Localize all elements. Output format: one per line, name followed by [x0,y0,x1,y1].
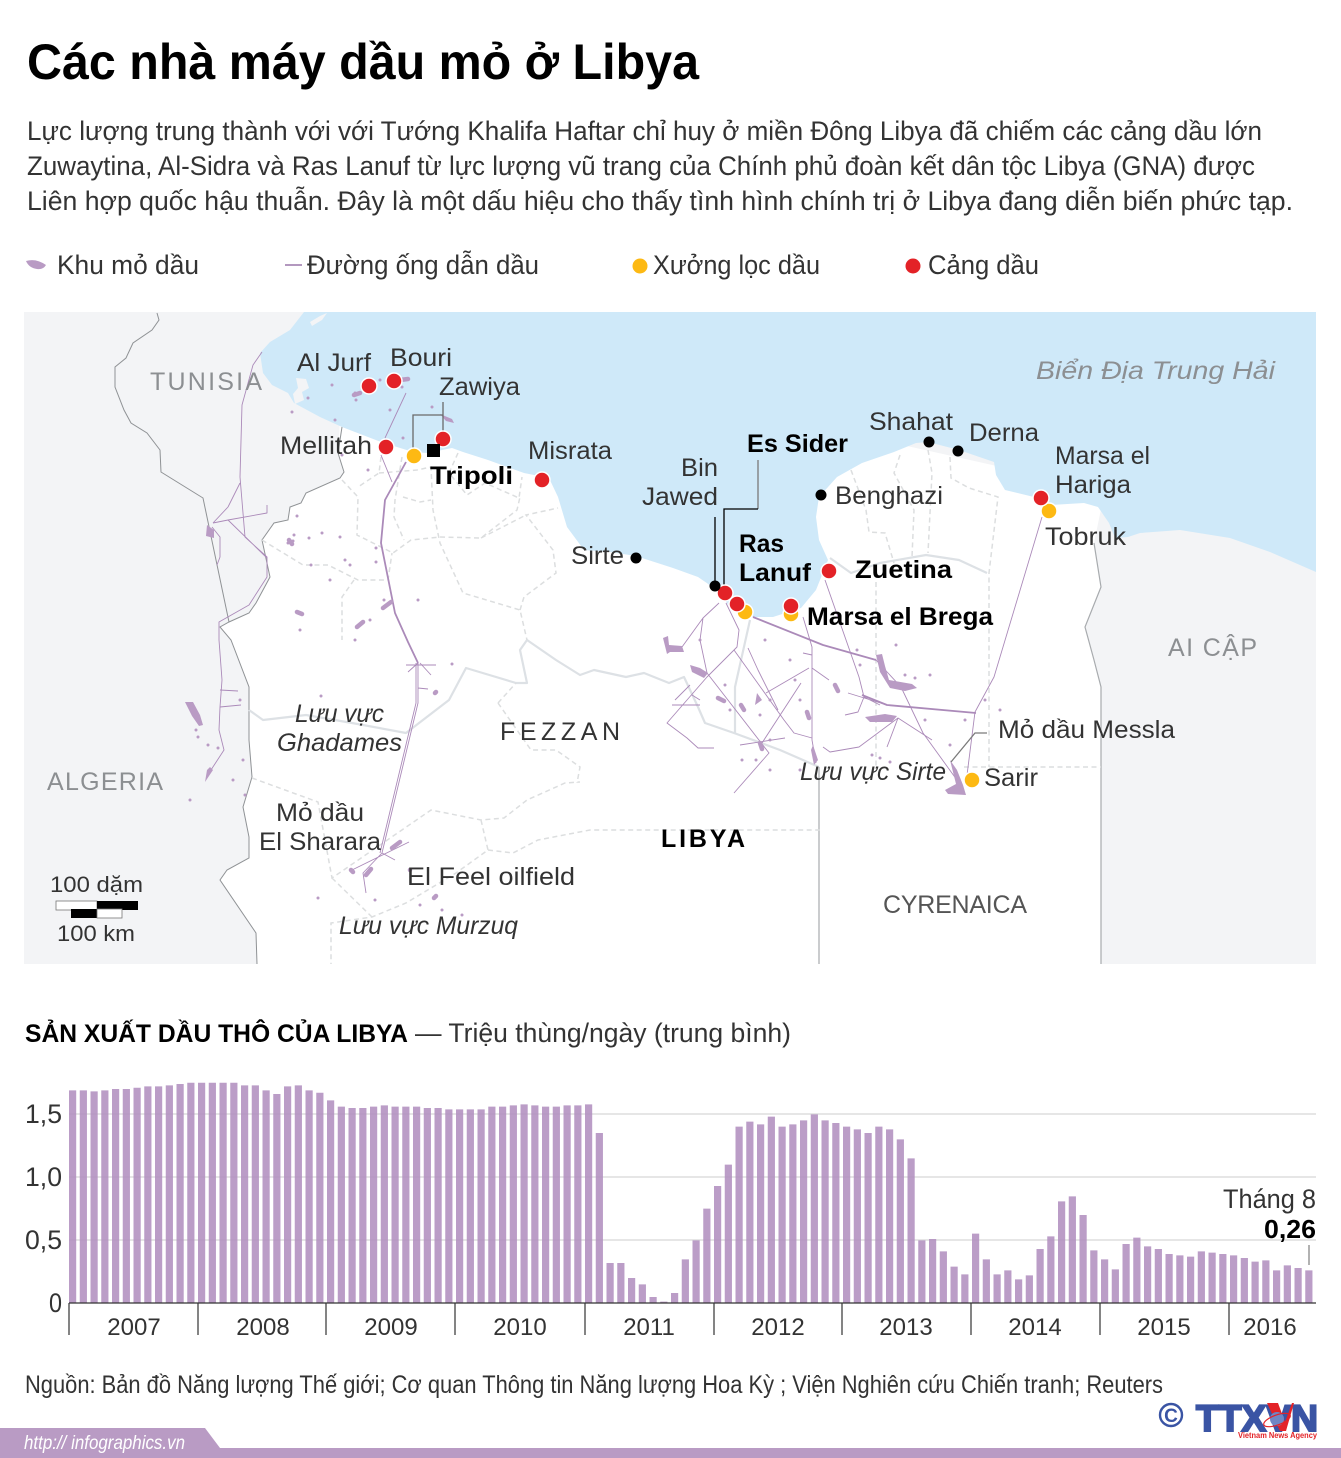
intro text block: Lực lượng trung thành với với Tướng Khalifa Haftar chỉ huy ở miền Đông Libya đã chiếm các cảng dầu lớn [27,116,1262,146]
scale bar: 100 km [57,921,135,946]
map labels: Ras [739,530,784,558]
map labels: TUNISIA [150,368,262,396]
logo: TTXVN: TTXVN [1196,1398,1318,1439]
legend: pipeline: Đường ống dẫn dầu [307,249,539,280]
map labels: Es Sider [747,430,848,458]
map labels: CYRENAICA [883,891,1027,919]
legend: oil port: Cảng dầu [928,250,1039,280]
map labels: Marsa el [1055,442,1150,470]
source: Nguồn: Bản đồ Năng lượng Thế giới; Cơ quan Thông tin Năng lượng Hoa Kỳ ; Viện Nghiên cứu Chiến tranh; Reuters [25,1371,1163,1399]
scale bar: 100 dặm [50,872,143,897]
legend: oil field: Khu mỏ dầu [57,250,199,280]
map labels: Misrata [528,437,612,465]
oil fields [185,379,1000,915]
map labels: Derna [969,419,1039,447]
legend [26,249,1039,280]
map labels: Lưu vực Sirte [800,758,946,786]
map labels: Marsa el Brega [807,603,994,631]
intro text block: Zuwaytina, Al-Sidra và Ras Lanuf từ lực lượng vũ trang của Chính phủ đoàn kết dân tộc Libya (GNA) được [27,151,1255,181]
year labels: 2011 [623,1314,675,1341]
chart heading: — Triệu thùng/ngày (trung bình) [415,1018,791,1048]
pipelines [209,352,1042,893]
intro text block: Liên hợp quốc hậu thuẫn. Đây là một dấu hiệu cho thấy tình hình chính trị ở Libya đang diễn biến phức tạp. [27,185,1293,216]
logo: TTXVN: Vietnam News Agency [1238,1431,1318,1440]
chart heading: SẢN XUẤT DẦU THÔ CỦA LIBYA [25,1018,408,1048]
map labels: Hariga [1055,471,1131,499]
year labels: 2016 [1243,1314,1297,1341]
map labels: Zuetina [855,556,953,584]
map labels [47,344,1277,940]
map labels: LIBYA [661,825,745,853]
marker: oil ports and refineries [361,373,1057,788]
year labels: 2014 [1008,1314,1062,1341]
callout: August 2016 value: Tháng 8 [1223,1184,1316,1214]
map labels: FEZZAN [500,718,620,746]
callout: August 2016 value: 0,26 [1264,1214,1316,1244]
sea [260,312,1316,617]
marker: cities [427,436,964,592]
map labels: Sarir [984,764,1038,792]
footer band: http:// infographics.vn [24,1433,185,1454]
map labels: Biển Địa Trung Hải [1036,357,1277,385]
year labels [107,1314,1297,1341]
y axis labels: 1,5 [25,1099,62,1129]
map labels: ALGERIA [47,768,163,796]
map labels: Bin [681,454,718,482]
map labels: Mỏ dầu Messla [998,716,1175,744]
map labels: Al Jurf [297,349,371,377]
monthly bars [69,1083,1312,1303]
footer band [0,1428,1341,1458]
country borders [115,313,344,964]
logo: TTXVN: C [1164,1406,1178,1427]
year labels: 2007 [107,1314,161,1341]
y axis labels: 0,5 [25,1225,62,1255]
axis and year ticks [69,1303,1316,1335]
chart heading [25,1018,791,1048]
year labels: 2009 [364,1314,418,1341]
map labels: Mellitah [280,432,372,460]
map labels: Benghazi [835,482,943,510]
map panel [24,312,1316,964]
map labels: El Sharara [259,828,381,856]
year labels: 2015 [1137,1314,1191,1341]
intro text block [27,116,1293,216]
map labels: Ghadames [277,729,402,757]
map labels: Shahat [869,408,953,436]
map labels: Tripoli [430,462,513,490]
year labels: 2008 [236,1314,290,1341]
map labels: Lưu vực Murzuq [339,912,518,940]
y axis labels: 1,0 [25,1162,62,1192]
Libya land [220,400,1105,964]
callout: August 2016 value [1223,1184,1316,1265]
map labels: Lanuf [739,559,812,587]
year labels: 2012 [751,1314,805,1341]
map labels: Jawed [642,483,718,511]
year labels: 2010 [493,1314,547,1341]
map labels: Mỏ dầu [276,799,364,827]
map labels: Zawiya [439,373,520,401]
map labels: Lưu vực [295,700,384,728]
y axis labels: 0 [49,1288,62,1318]
callout lines [413,402,987,762]
title: Các nhà máy dầu mỏ ở Libya [27,34,700,90]
map labels: Sirte [571,542,624,570]
map labels: El Feel oilfield [407,863,575,891]
year labels: 2013 [879,1314,933,1341]
map labels: AI CẬP [1168,633,1257,662]
y axis labels [25,1099,62,1318]
bar chart: crude oil production [25,1083,1316,1341]
regional boundaries [249,450,1101,964]
legend: refinery: Xưởng lọc dầu [653,250,820,280]
map labels: Tobruk [1045,523,1127,551]
map labels: Bouri [390,344,452,372]
scale bar [50,872,143,946]
